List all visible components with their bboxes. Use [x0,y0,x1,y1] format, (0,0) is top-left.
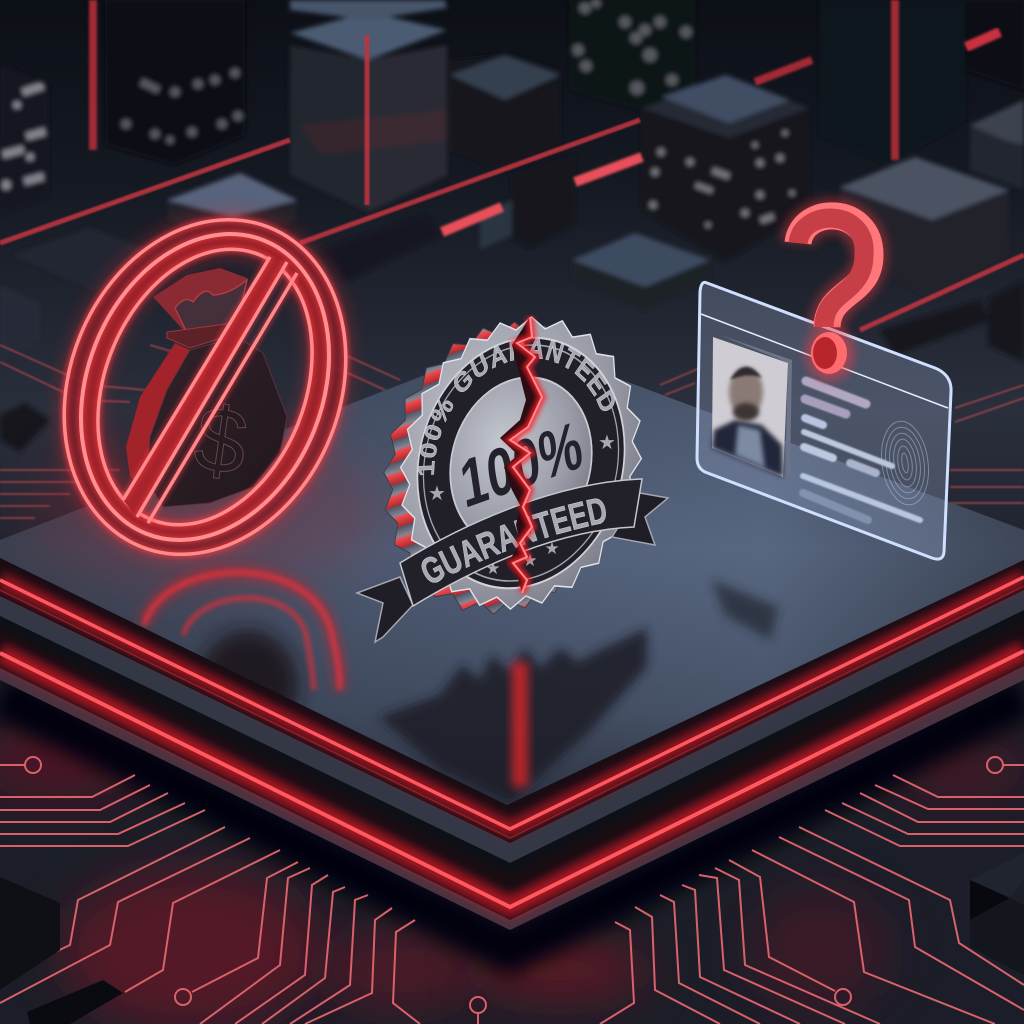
ribbon band [400,479,642,606]
stars: ★ [544,539,560,558]
card header line [701,314,948,408]
badge face: 100% GUARANTEED [418,338,615,476]
platform reflections [144,572,778,803]
question mark dot [806,325,854,381]
slash [123,257,297,523]
red neon background lines [0,0,1024,330]
question mark [798,216,870,327]
ring text [420,332,613,533]
stars: ★ [522,551,538,570]
photo [712,335,792,477]
ribbon text [429,521,613,586]
circuit traces, mid level [0,345,1024,518]
ring glow [37,197,373,577]
stars: ★ [598,432,616,454]
neon line: lower platform edge [0,651,1024,907]
badge face [400,316,642,610]
stars: ★ [485,559,501,578]
ribbon tail right [612,493,668,545]
id card [697,282,951,559]
text bars [803,381,920,520]
ribbon tail left [357,577,413,642]
badge: cracked 100% guaranteed seal [355,314,670,644]
crack dark wedge [500,317,542,593]
fingerprint [876,418,934,508]
stars: ★ [428,483,446,505]
icon: crossed-out money bag [15,177,395,597]
card body [697,282,951,559]
platform edge bands [0,558,1024,930]
crack line [510,317,542,593]
center text: 100% [456,407,587,523]
shadow under platform [0,695,1024,950]
neon line: upper platform edge [0,577,1024,838]
platform top surface [0,340,1024,805]
money bag [126,268,287,507]
bottom circuit board [0,695,1024,1024]
stars [428,432,616,578]
badge: cracked 100% guaranteed seal: GUARANTEED [422,498,606,583]
crack glow [510,317,542,593]
dollar sign: $ [188,387,253,495]
badge depth [364,286,644,650]
background city blocks [0,0,1024,452]
ring [15,177,395,597]
